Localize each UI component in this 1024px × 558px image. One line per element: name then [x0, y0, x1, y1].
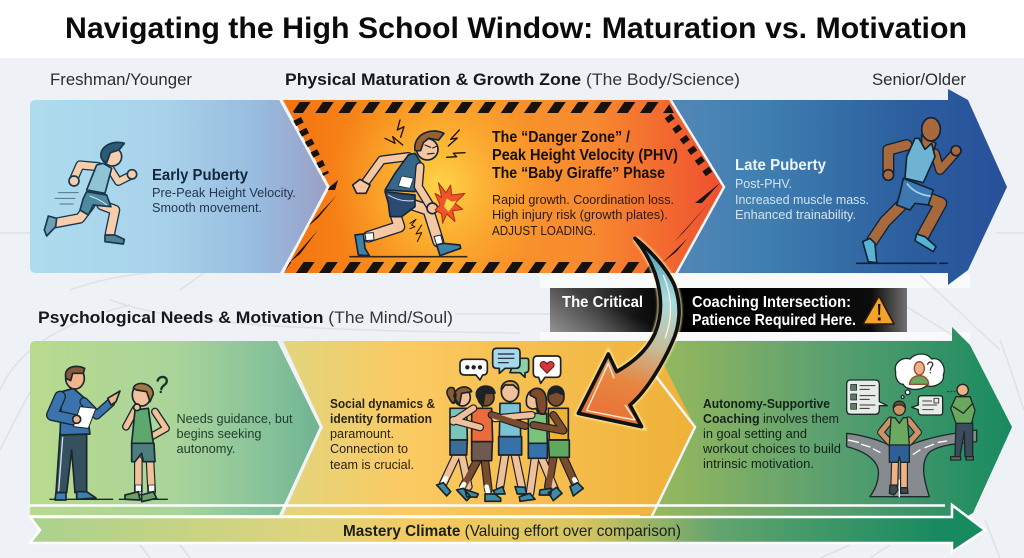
arrow highlight — [587, 275, 670, 420]
callout text: The Critical — [562, 294, 643, 311]
social dynamics text: Social dynamics & — [330, 396, 435, 411]
panel: late puberty arrow — [665, 89, 1007, 285]
needs guidance text — [176, 411, 293, 456]
late puberty text: Enhanced trainability. — [735, 207, 856, 222]
needs guidance text: Needs guidance, but — [176, 411, 293, 426]
early puberty text: Pre-Peak Height Velocity. — [152, 185, 296, 200]
social dynamics text: identity formation — [330, 411, 432, 426]
team members — [447, 381, 569, 461]
early puberty text — [152, 167, 296, 215]
danger zone text: Peak Height Velocity (PHV) — [492, 147, 678, 164]
title: Navigating the High School Window: Maturation vs. Motivation — [65, 12, 967, 45]
late puberty text: Post-PHV. — [735, 176, 792, 191]
mastery climate arrow — [30, 505, 985, 552]
panel: social dynamics chevron — [283, 341, 695, 515]
arrow: curved critical arrow — [578, 238, 679, 427]
speech bubbles — [460, 348, 561, 383]
icon: coach and young athlete — [50, 366, 167, 502]
social dynamics text: Connection to — [330, 441, 408, 456]
panel: autonomy coaching arrow — [640, 327, 1012, 520]
chevron dividers (white lines) — [278, 99, 724, 516]
icon: team huddle — [437, 348, 583, 501]
autonomy coaching text: workout choices to build — [702, 441, 841, 456]
late puberty text: Increased muscle mass. — [735, 192, 869, 207]
icon: injured runner — [350, 120, 467, 257]
danger zone text: ADJUST LOADING. — [492, 223, 596, 238]
callout text: Patience Required Here. — [692, 312, 856, 329]
panel: needs guidance chevron — [30, 341, 320, 515]
danger zone text: High injury risk (growth plates). — [492, 207, 668, 222]
road-side coach — [947, 384, 975, 460]
icon: warning triangle — [863, 296, 894, 324]
autonomy coaching text: Autonomy-Supportive — [703, 396, 830, 411]
autonomy coaching text — [702, 396, 841, 471]
callout text — [562, 294, 856, 329]
coach — [52, 366, 120, 500]
athlete back view — [881, 401, 918, 495]
danger zone text: The “Baby Giraffe” Phase — [492, 165, 665, 182]
team legs — [443, 455, 577, 493]
needs guidance text: begins seeking — [176, 426, 262, 441]
danger zone text — [492, 129, 678, 238]
young athlete — [125, 383, 166, 502]
callout: critical coaching intersection — [550, 288, 907, 332]
autonomy coaching text: intrinsic motivation. — [703, 456, 814, 471]
panel: early puberty chevron — [30, 100, 328, 273]
icon: young runner — [44, 142, 137, 244]
label: freshman: Freshman/Younger — [50, 70, 192, 89]
early puberty text: Smooth movement. — [152, 200, 262, 215]
panel: danger zone chevron — [283, 100, 724, 273]
hazard stripes — [283, 102, 720, 273]
late puberty text — [735, 157, 869, 222]
autonomy coaching text: Coaching involves them — [703, 411, 839, 426]
label: senior: Senior/Older — [872, 70, 966, 89]
autonomy coaching text: in goal setting and — [703, 426, 807, 441]
social dynamics text: team is crucial. — [330, 457, 414, 472]
heading: psychological needs: Psychological Needs & Motivation (The Mind/Soul) — [38, 308, 453, 327]
callout text: Coaching Intersection: — [692, 294, 851, 311]
early puberty text: Early Puberty — [152, 167, 248, 184]
social dynamics text — [330, 396, 435, 472]
late puberty text: Late Puberty — [735, 157, 826, 174]
icon: mature runner — [857, 118, 961, 263]
icon: athlete at forked road — [847, 354, 977, 497]
thought and speech bubbles — [847, 354, 944, 415]
social dynamics text: paramount. — [330, 426, 394, 441]
danger zone text: The “Danger Zone” / — [492, 129, 631, 146]
needs guidance text: autonomy. — [176, 441, 236, 456]
question mark — [158, 377, 167, 392]
heading: physical maturation: Physical Maturation & Growth Zone (The Body/Science) — [285, 70, 740, 89]
danger zone text: Rapid growth. Coordination loss. — [492, 192, 674, 207]
mastery climate text: Mastery Climate (Valuing effort over comparison) — [343, 523, 681, 540]
